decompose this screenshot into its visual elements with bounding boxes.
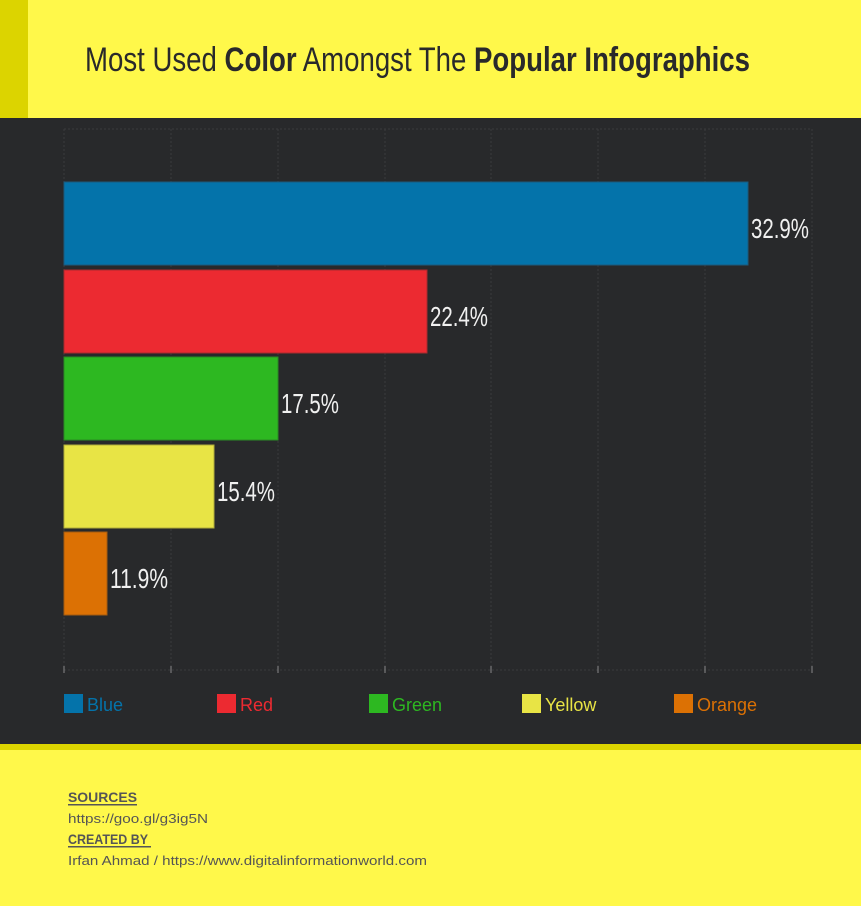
bar: orange: 11.9% <box>110 563 168 594</box>
created by heading: CREATED BY <box>68 831 149 847</box>
bar: green <box>64 357 339 440</box>
chart panel <box>0 118 861 744</box>
bar: orange <box>64 532 168 615</box>
legend <box>64 694 757 715</box>
legend: orange <box>674 694 757 715</box>
author: Irfan Ahmad / https://www.digitalinformationworld.com <box>68 853 427 868</box>
legend: blue <box>64 694 123 715</box>
legend: yellow <box>522 694 597 715</box>
bar: red: 22.4% <box>430 301 488 332</box>
bar chart <box>64 182 809 615</box>
sources link: https://goo.gl/g3ig5N <box>68 811 208 826</box>
bar: yellow: 15.4% <box>217 476 275 507</box>
sources heading: SOURCES <box>68 789 137 805</box>
legend: red <box>217 694 273 715</box>
bar: blue: 32.9% <box>751 213 809 244</box>
bar: green: 17.5% <box>281 388 339 419</box>
legend: blue: Blue <box>87 695 123 715</box>
bar: yellow <box>64 445 275 528</box>
legend: green: Green <box>392 695 442 715</box>
footer panel <box>0 744 861 906</box>
legend: yellow: Yellow <box>545 695 597 715</box>
legend: orange: Orange <box>697 695 757 715</box>
legend: green <box>369 694 442 715</box>
legend: red: Red <box>240 695 273 715</box>
title: Most Used Color Amongst The Popular Infographics <box>85 41 750 79</box>
bar: red <box>64 270 488 353</box>
bar: blue <box>64 182 809 265</box>
header panel <box>0 0 861 118</box>
